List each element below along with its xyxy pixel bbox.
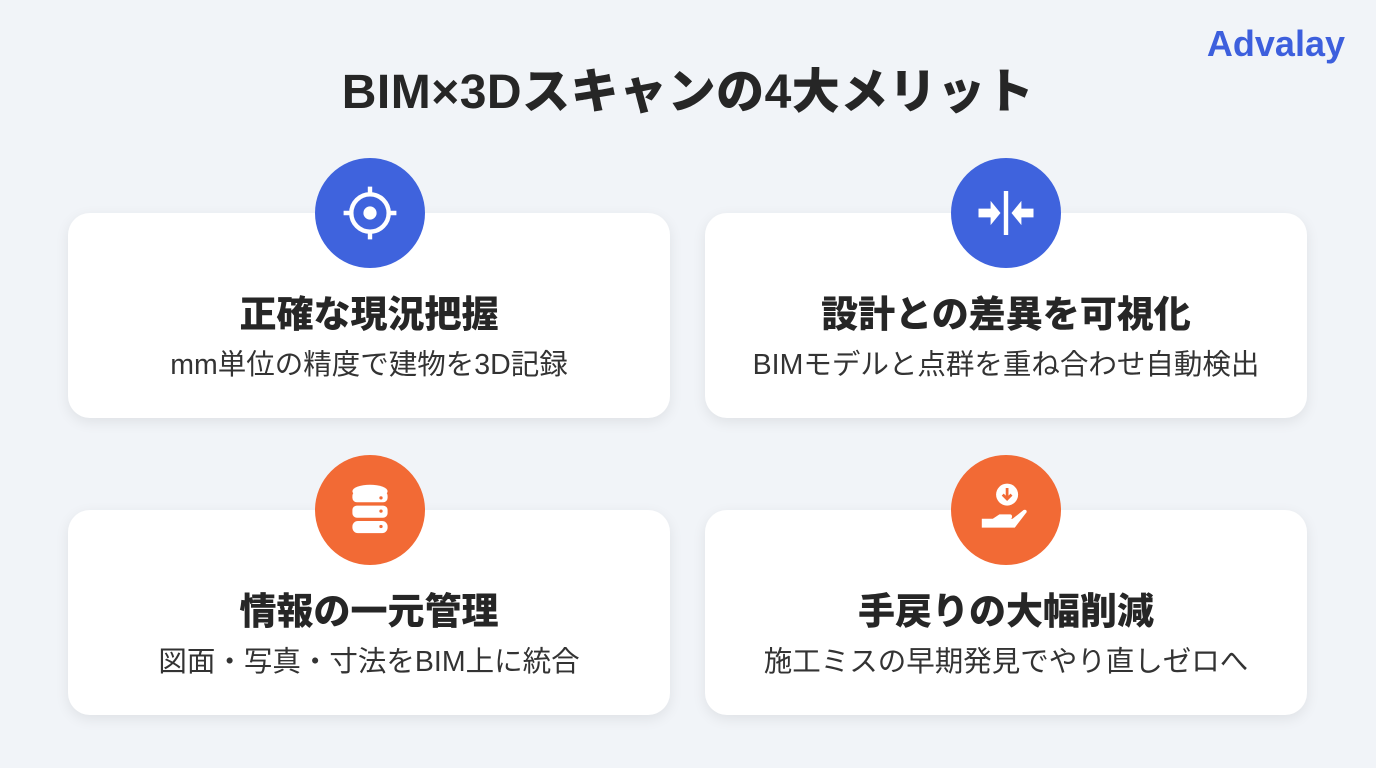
icon: compare arrows: [951, 158, 1061, 268]
panel: rework: [705, 510, 1307, 715]
panel: accuracy: [68, 213, 670, 418]
icon: hand with download: [951, 455, 1061, 565]
panel: difference: [705, 213, 1307, 418]
icon: database: [315, 455, 425, 565]
text: BIMモデルと点群を重ね合わせ自動検出: [753, 349, 1259, 381]
icon: target: [315, 158, 425, 268]
heading: 情報の一元管理: [240, 591, 498, 632]
heading: 手戻りの大幅削減: [858, 591, 1154, 632]
heading: 設計との差異を可視化: [821, 294, 1191, 335]
title: BIM×3Dスキャンの4大メリット: [342, 66, 1034, 119]
panel: unified: [68, 510, 670, 715]
heading: 正確な現況把握: [240, 294, 498, 335]
logo: Advalay: [1207, 23, 1345, 64]
text: 施工ミスの早期発見でやり直しゼロへ: [764, 646, 1248, 678]
text: mm単位の精度で建物を3D記録: [170, 349, 568, 381]
text: 図面・写真・寸法をBIM上に統合: [158, 646, 580, 678]
